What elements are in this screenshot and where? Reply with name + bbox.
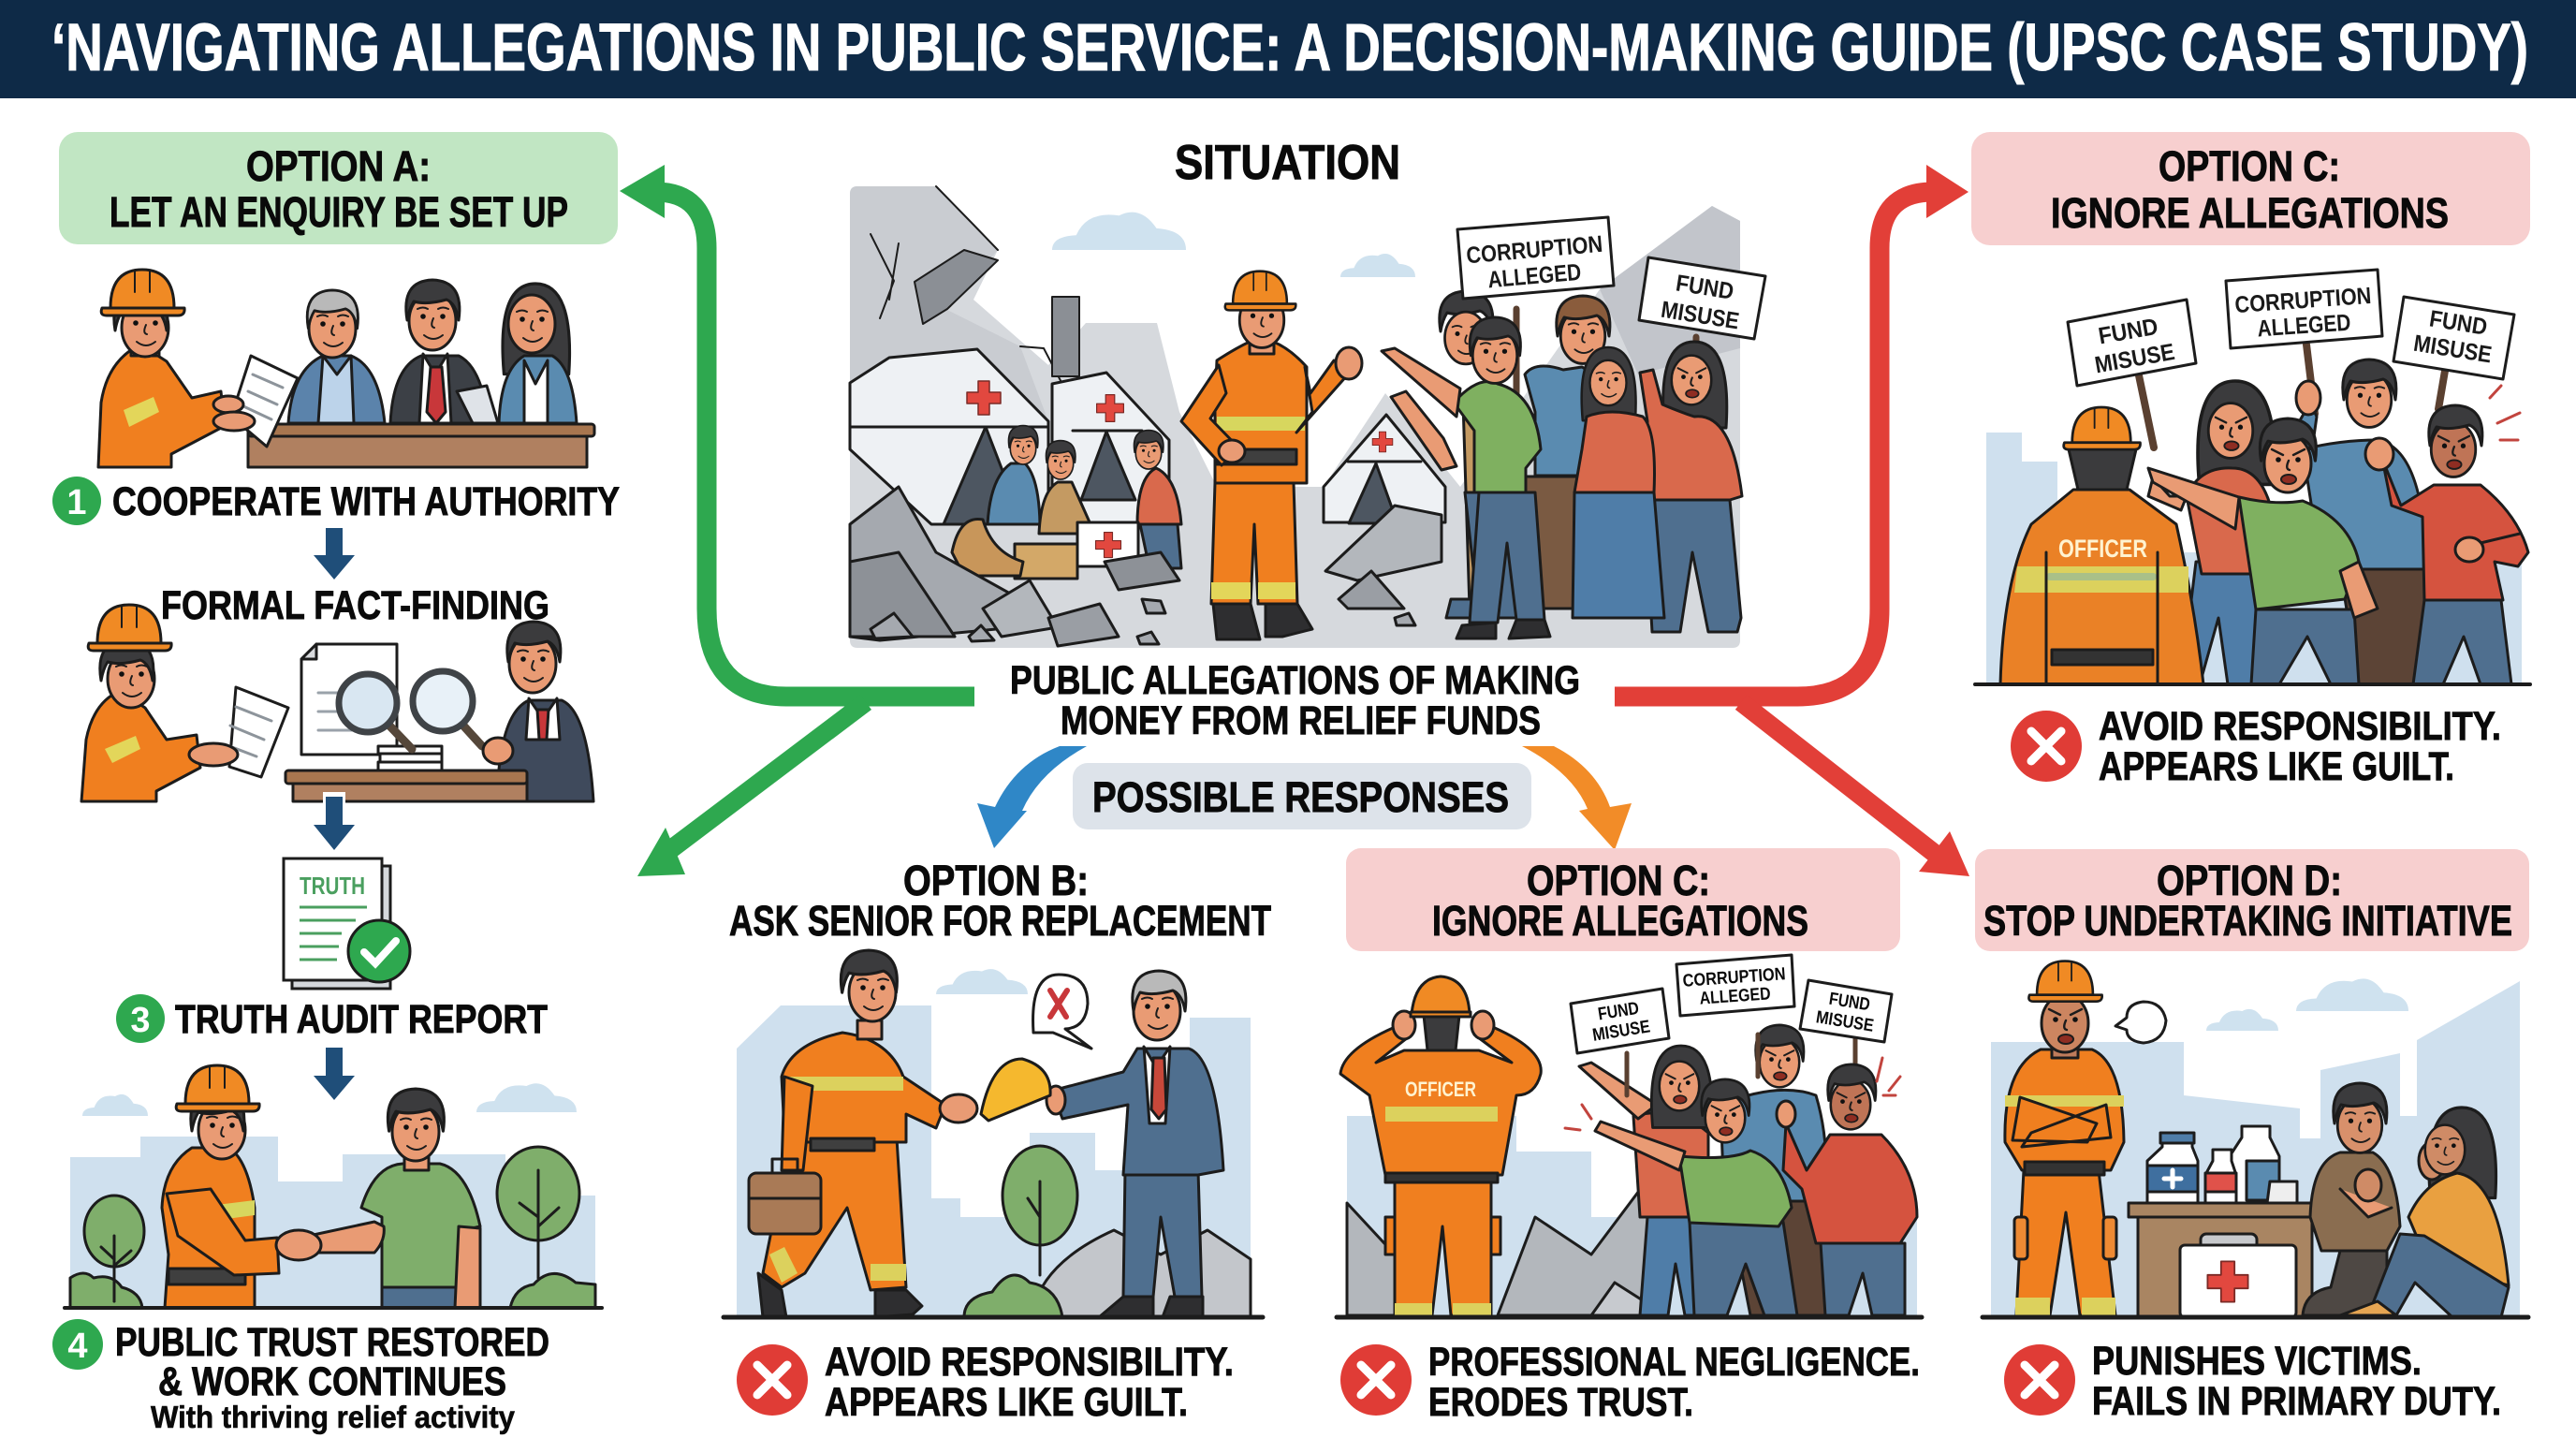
- illustration: officer accused at relief camp: CORRUPTION: [1465, 231, 1603, 269]
- option C heading: OPTION C:: [1527, 857, 1710, 904]
- arrow: step 2 to 3: [314, 792, 355, 850]
- arrow: blue to option B: [977, 746, 1087, 848]
- panel: option D stop undertaking initiative: [1975, 849, 2529, 1424]
- arrow: step 3 to 4: [314, 1048, 355, 1100]
- arrow: green to option A: [620, 165, 974, 697]
- panel: situation: [850, 136, 1765, 829]
- possible responses pill: POSSIBLE RESPONSES: [1092, 773, 1509, 821]
- option B heading: OPTION B:: [903, 857, 1089, 904]
- verdict text: [2099, 704, 2501, 789]
- illustration: officer facing protesters: FUND: [2427, 305, 2489, 341]
- step 1 badge: [52, 477, 101, 525]
- icon: red cross-mark: [1340, 1344, 1412, 1416]
- panel: option B ask senior for replacement: [724, 857, 1271, 1425]
- verdict text: PROFESSIONAL NEGLIGENCE.: [1428, 1340, 1920, 1385]
- step 4 badge: 4: [67, 1327, 88, 1366]
- option A heading: [59, 132, 618, 244]
- option A heading: LET AN ENQUIRY BE SET UP: [110, 188, 568, 236]
- option C heading: [1971, 132, 2530, 245]
- step 3 badge: [116, 994, 165, 1043]
- illustration: officer facing protesters: MISUSE: [2093, 339, 2176, 378]
- illustration: officer facing protesters: ALLEGED: [2257, 310, 2351, 342]
- verdict text: FAILS IN PRIMARY DUTY.: [2092, 1379, 2501, 1424]
- situation caption: MONEY FROM RELIEF FUNDS: [1061, 698, 1541, 743]
- step 4 badge: [52, 1319, 103, 1370]
- icon: red cross-mark: [2011, 711, 2082, 782]
- illustration: officer hands helmet to senior: [724, 950, 1263, 1317]
- illustration: officer covers ears facing crowd: FUND: [1827, 990, 1871, 1015]
- verdict text: PUNISHES VICTIMS.: [2092, 1339, 2422, 1384]
- illustration: fact-finding desk: [81, 605, 593, 801]
- illustration: officer accused at relief camp: MISUSE: [1660, 297, 1741, 334]
- arrow: red to option D: [1741, 702, 1969, 876]
- verdict text: [2092, 1339, 2501, 1424]
- icon: red cross-mark: [737, 1344, 808, 1416]
- illustration: officer covers ears facing crowd: MISUSE: [1591, 1017, 1651, 1046]
- icon: truth report document: TRUTH: [300, 872, 365, 900]
- situation caption: PUBLIC ALLEGATIONS OF MAKING: [1010, 658, 1580, 703]
- step 1 badge: 1: [66, 483, 87, 522]
- option B heading: [729, 857, 1271, 945]
- header banner: [0, 0, 2576, 98]
- illustration: officer facing protesters: MISUSE: [2412, 330, 2494, 368]
- option A heading: OPTION A:: [246, 142, 431, 190]
- step 1 label: COOPERATE WITH AUTHORITY: [112, 479, 620, 524]
- situation heading: SITUATION: [1175, 136, 1400, 190]
- option D heading: OPTION D:: [2157, 857, 2342, 904]
- illustration: officer facing protesters: FUND: [2097, 314, 2160, 349]
- illustration: officer covers ears facing crowd: OFFICER: [1405, 1078, 1476, 1101]
- verdict text: [1428, 1340, 1920, 1425]
- illustration: officer covers ears facing crowd: MISUSE: [1815, 1007, 1875, 1036]
- illustration: officer facing protesters: [1975, 270, 2530, 684]
- panel: option A enquiry path: [52, 132, 620, 1434]
- panel: option C ignore allegations top right: [1971, 132, 2530, 789]
- verdict text: AVOID RESPONSIBILITY.: [825, 1340, 1234, 1385]
- option C heading: IGNORE ALLEGATIONS: [2051, 189, 2449, 237]
- illustration: officer facing protesters: CORRUPTION: [2234, 283, 2372, 318]
- verdict text: AVOID RESPONSIBILITY.: [2099, 704, 2501, 749]
- illustration: officer hands document to enquiry panel: [98, 270, 594, 467]
- illustration: officer refuses while victims suffer: [1983, 961, 2528, 1317]
- verdict text: APPEARS LIKE GUILT.: [825, 1380, 1188, 1425]
- panel: option C ignore allegations centre: [1337, 848, 1922, 1425]
- step 2 label: FORMAL FACT-FINDING: [161, 583, 549, 628]
- illustration: officer covers ears facing crowd: [1337, 955, 1922, 1317]
- verdict text: [825, 1340, 1234, 1425]
- option C heading: IGNORE ALLEGATIONS: [1432, 897, 1808, 945]
- step 4 outcome text: PUBLIC TRUST RESTORED: [115, 1320, 549, 1365]
- arrow: red to top option C: [1615, 165, 1969, 697]
- step 4 outcome text: & WORK CONTINUES: [158, 1359, 506, 1404]
- illustration: handshake restores trust: [65, 1065, 602, 1308]
- option B heading: ASK SENIOR FOR REPLACEMENT: [729, 897, 1271, 945]
- illustration: officer facing protesters: OFFICER: [2058, 535, 2147, 563]
- option C heading: OPTION C:: [2159, 142, 2340, 190]
- step 3 badge: 3: [130, 1001, 151, 1040]
- illustration: officer covers ears facing crowd: CORRUPTION: [1682, 964, 1786, 991]
- icon: truth report document: [284, 858, 410, 989]
- illustration: officer covers ears facing crowd: FUND: [1597, 999, 1641, 1024]
- illustration: officer accused at relief camp: [850, 186, 1765, 648]
- arrow: green to option B: [637, 702, 866, 876]
- step 3 label: TRUTH AUDIT REPORT: [175, 997, 548, 1042]
- step 4 outcome text: With thriving relief activity: [151, 1400, 516, 1434]
- arrow: step 1 to 2: [314, 528, 355, 580]
- illustration: officer covers ears facing crowd: ALLEGED: [1699, 984, 1771, 1009]
- verdict text: APPEARS LIKE GUILT.: [2099, 744, 2454, 789]
- illustration: officer accused at relief camp: ALLEGED: [1486, 259, 1582, 293]
- icon: red cross-mark: [2004, 1344, 2075, 1416]
- arrow: orange to option C: [1522, 746, 1632, 850]
- step 4 outcome text: [115, 1320, 549, 1434]
- option D heading: [1975, 849, 2529, 951]
- illustration: officer accused at relief camp: FUND: [1674, 270, 1735, 305]
- option C heading: [1346, 848, 1900, 951]
- possible responses pill: [1073, 763, 1531, 829]
- verdict text: ERODES TRUST.: [1428, 1380, 1693, 1425]
- situation caption: [1010, 658, 1580, 743]
